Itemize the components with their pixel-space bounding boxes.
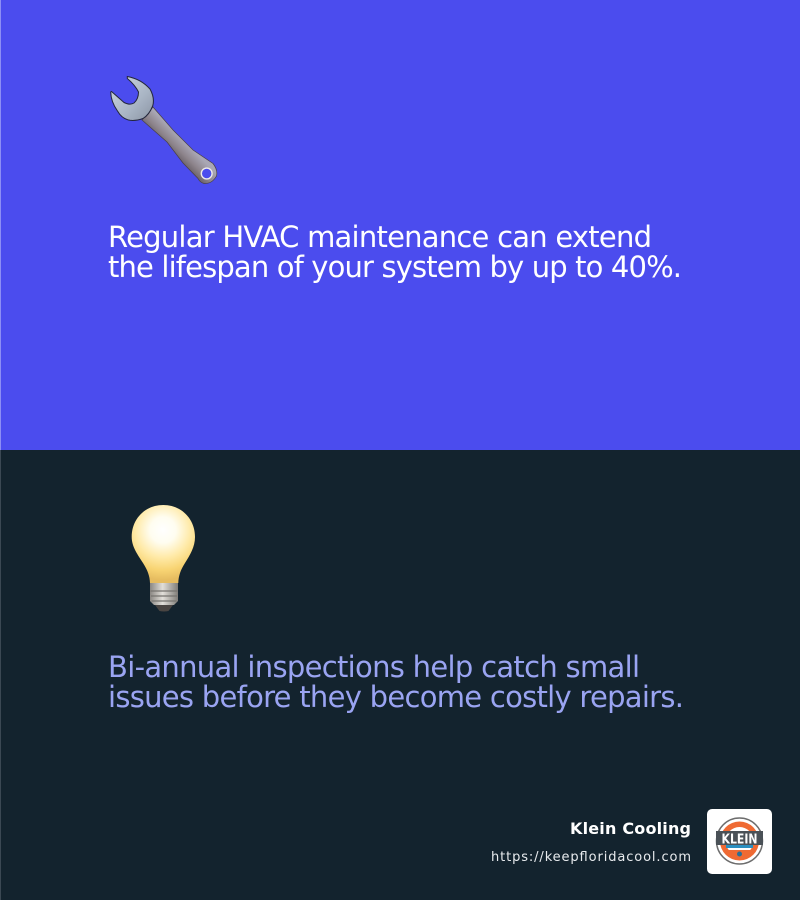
- footer: company branding: [491, 809, 772, 874]
- icon: wrench: [111, 76, 217, 184]
- company name: Klein Cooling: [570, 819, 691, 838]
- logo: Klein Cooling badge: [707, 809, 772, 874]
- text: inspection statement: [108, 650, 684, 714]
- text: maintenance statement: the lifespan of your system by up to 40%.: [108, 250, 682, 284]
- panel: maintenance fact: [0, 0, 800, 450]
- company url: https://keepfloridacool.com: [491, 850, 691, 865]
- text: maintenance statement: Regular HVAC maintenance can extend: [108, 220, 652, 254]
- text: inspection statement: Bi-annual inspections help catch small: [108, 650, 640, 684]
- panel: inspection fact: [0, 450, 800, 900]
- text: inspection statement: issues before they become costly repairs.: [108, 680, 684, 714]
- text: maintenance statement: [108, 220, 682, 284]
- icon: light bulb: [132, 505, 195, 612]
- logo: Klein Cooling badge: KLEIN: [722, 832, 758, 848]
